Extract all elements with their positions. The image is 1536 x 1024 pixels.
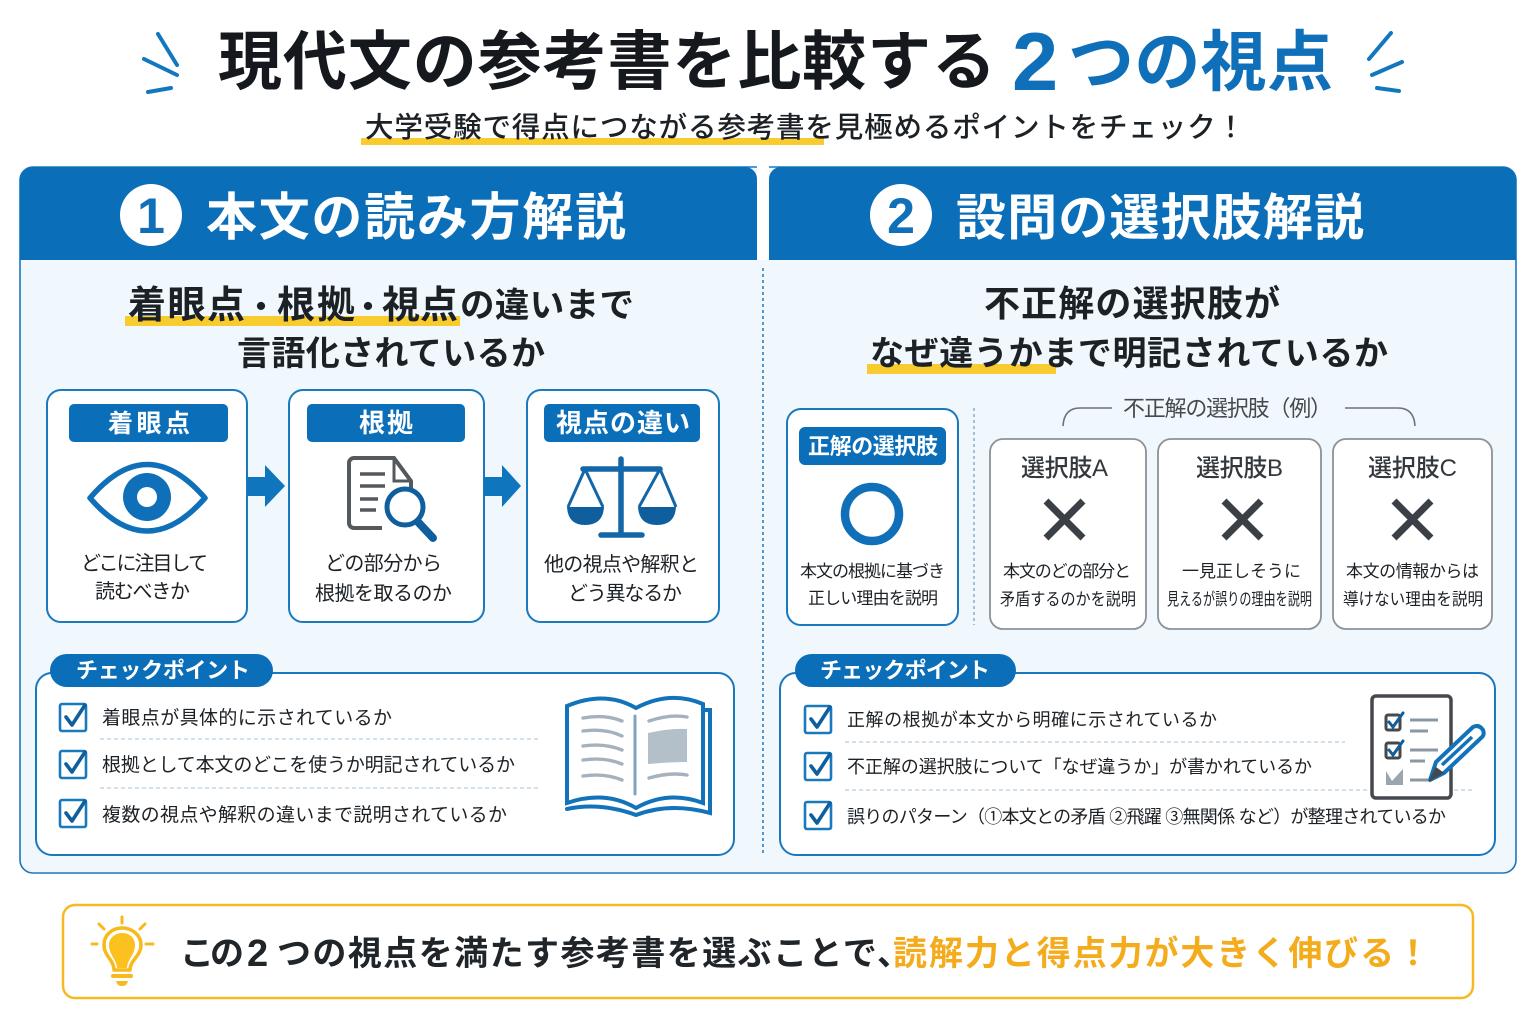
card: viewpoint difference: どう異なるか	[568, 582, 682, 605]
header 2: 設問の選択肢解説	[956, 190, 1364, 246]
icon: cross A	[1046, 501, 1083, 538]
check item 1: 正解の根拠が本文から明確に示されているか	[847, 710, 1217, 730]
check item 2: 根拠として本文のどこを使うか明記されているか	[102, 754, 515, 776]
check item 1	[60, 704, 392, 731]
card: choice A	[990, 439, 1146, 629]
panel 1: reading explanation	[20, 167, 757, 855]
heading 1: 根拠	[277, 285, 355, 327]
bottom callout: 読解力と得点力が大きく伸びる！	[893, 934, 1430, 973]
card: evidence	[289, 390, 484, 622]
card: evidence: どの部分から	[325, 552, 442, 575]
icon: open book	[567, 698, 710, 815]
check item 3: 誤りのパターン（①本文との矛盾 ②飛躍 ③無関係 など）が整理されているか	[847, 807, 1446, 827]
decorative spark marks: right	[1369, 33, 1402, 91]
icon: checklist and pencil	[1372, 696, 1484, 798]
card: focus point: 読むべきか	[95, 580, 190, 603]
heading 1	[125, 285, 634, 373]
check item 2: 不正解の選択肢について「なぜ違うか」が書かれているか	[847, 757, 1312, 777]
icon: eye	[90, 464, 205, 531]
card: choice A: 矛盾するのかを説明	[1000, 590, 1136, 609]
card: correct choice: 正解の選択肢	[808, 434, 938, 459]
check item 1: 着眼点が具体的に示されているか	[102, 707, 392, 729]
card: choice B: 一見正しそうに	[1182, 562, 1301, 581]
card: choice A: 選択肢A	[1021, 455, 1108, 482]
icon: circle mark	[845, 487, 899, 541]
icon: cross C	[1394, 501, 1431, 538]
card: choice C: 選択肢C	[1368, 455, 1457, 482]
decorative spark marks: left	[144, 34, 177, 92]
panel 2: answer choices explanation	[769, 167, 1516, 855]
heading 1: 着眼点	[128, 285, 245, 327]
checkpoints panel 2	[780, 654, 1495, 855]
bracket label: incorrect examples: 不正解の選択肢（例）	[1123, 396, 1332, 421]
tag 1	[50, 654, 273, 687]
header 1: 1	[137, 188, 165, 244]
check item 2	[805, 753, 1312, 780]
card: viewpoint difference: 視点の違い	[556, 408, 690, 438]
header 1	[20, 167, 757, 260]
check item 1	[805, 706, 1217, 733]
heading 2: なぜ違うかまで明記されているか	[870, 335, 1388, 373]
card: choice C: 導けない理由を説明	[1343, 590, 1483, 609]
icon: balance scale	[567, 459, 676, 535]
subtitle: 大学受験で得点につながる参考書を見極めるポイントをチェック！	[365, 112, 1245, 144]
heading 1: の違いまで	[460, 287, 634, 325]
card: choice B: 見えるが誤りの理由を説明	[1167, 590, 1312, 609]
header 1: 本文の読み方解説	[206, 189, 626, 246]
check item 3: 複数の視点や解釈の違いまで説明されているか	[102, 804, 507, 826]
tag 2: チェックポイント	[820, 658, 990, 683]
card: focus point: どこに注目して	[81, 552, 208, 575]
heading 1: ・	[245, 289, 277, 325]
heading 1: 言語化されているか	[237, 335, 545, 373]
card: evidence: 根拠	[359, 408, 413, 438]
card: focus point	[47, 390, 247, 622]
card: viewpoint difference	[527, 390, 719, 622]
icon: cross B	[1224, 501, 1261, 538]
heading 1: 視点	[382, 285, 458, 327]
panel background	[20, 166, 1516, 873]
card: choice C	[1333, 439, 1492, 629]
title: 2	[1012, 15, 1058, 108]
bracket label: incorrect examples	[1063, 396, 1415, 426]
title	[218, 15, 1333, 108]
bottom callout: 2	[247, 933, 268, 975]
icon: document and magnifier	[349, 458, 433, 538]
bottom callout: この	[180, 935, 244, 973]
card: choice A: 本文のどの部分と	[1003, 562, 1131, 581]
card: correct choice: 正しい理由を説明	[808, 589, 938, 608]
header 2: 2	[887, 188, 915, 244]
heading 1: ・	[352, 289, 384, 325]
bottom callout	[63, 905, 1473, 998]
arrow 2	[484, 465, 521, 507]
heading 2: 不正解の選択肢が	[984, 283, 1280, 324]
title: つの視点	[1068, 25, 1333, 99]
heading 2	[867, 283, 1388, 374]
card: viewpoint difference: 他の視点や解釈と	[544, 553, 699, 576]
icon: light bulb	[92, 917, 153, 986]
tag 1: チェックポイント	[76, 658, 250, 683]
checkpoints panel 1	[36, 654, 734, 855]
card: correct choice: 本文の根拠に基づき	[800, 562, 945, 581]
card: choice B: 選択肢B	[1196, 455, 1283, 482]
card: correct choice	[787, 409, 958, 625]
title: 現代文の参考書を比較する	[218, 26, 996, 98]
card: evidence: 根拠を取るのか	[315, 582, 452, 605]
check item 3	[805, 802, 1446, 829]
header 2	[769, 167, 1516, 260]
tag 2	[795, 654, 1016, 687]
card: choice B	[1158, 439, 1321, 629]
card: choice C: 本文の情報からは	[1346, 562, 1479, 581]
card: focus point: 着眼点	[108, 410, 190, 438]
bottom callout: つの視点を満たす参考書を選ぶことで、	[277, 935, 911, 973]
arrow 1	[247, 465, 285, 507]
